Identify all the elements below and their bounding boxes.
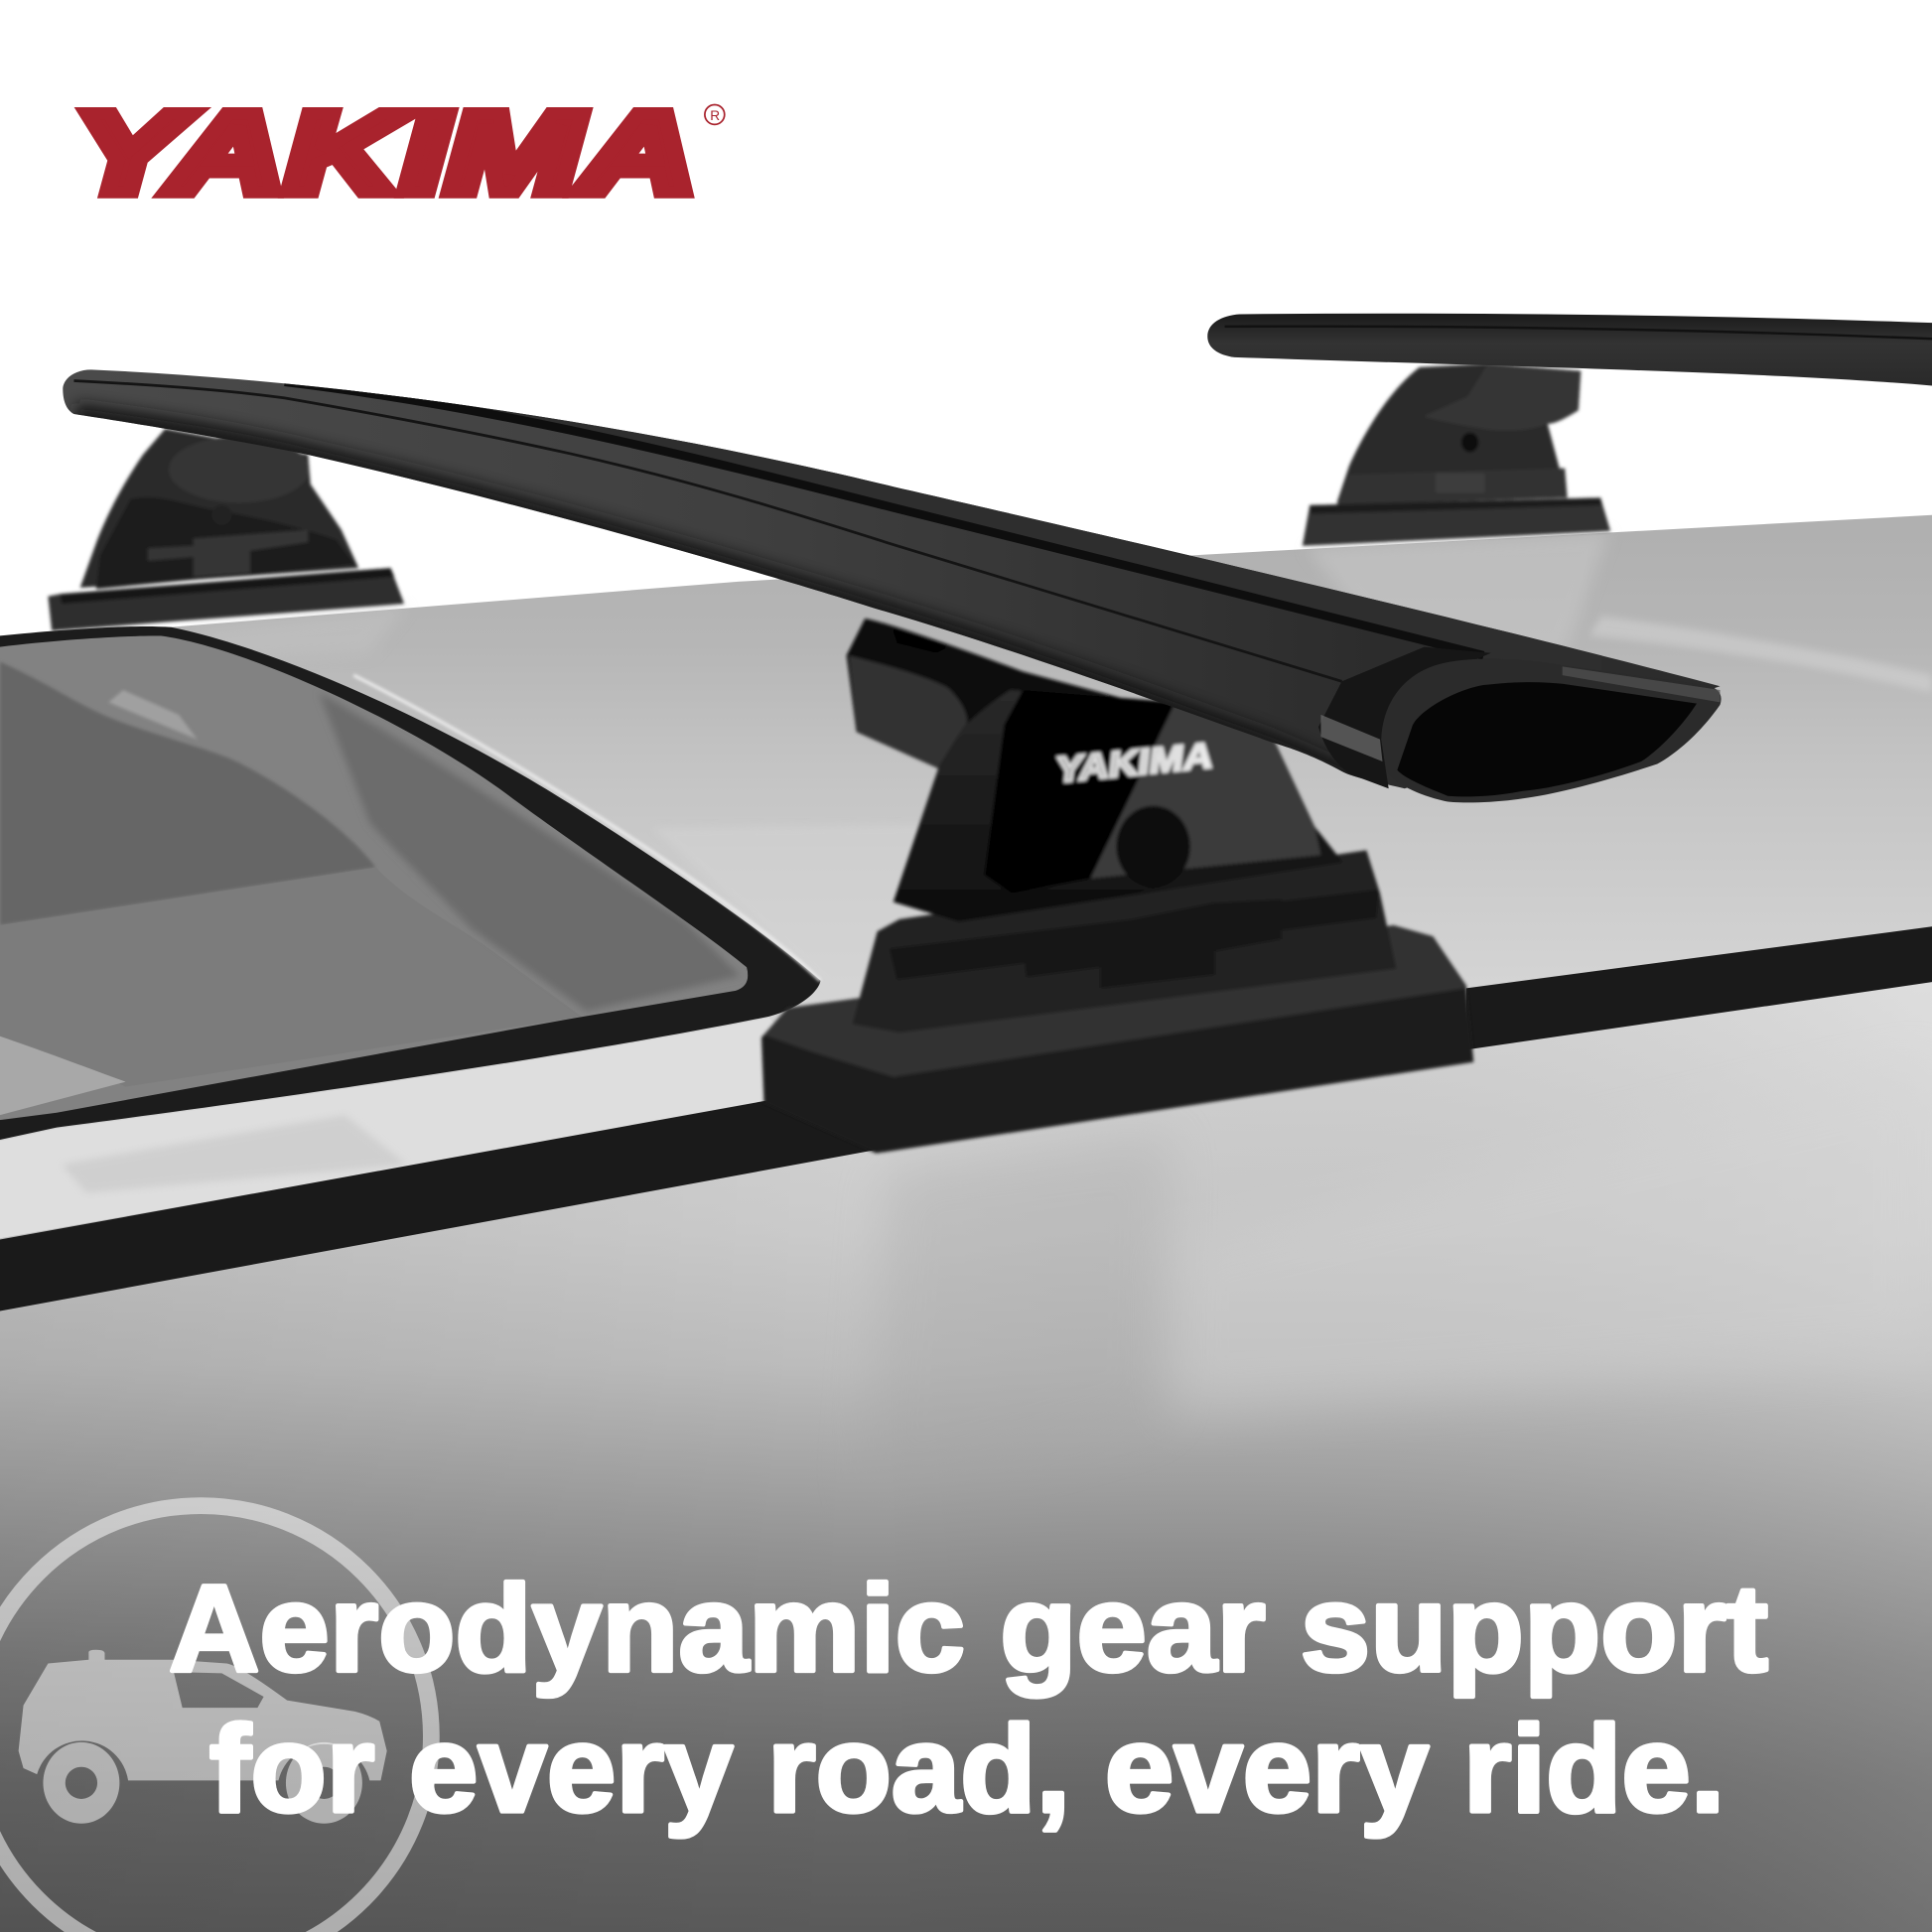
foot glossy tower	[894, 690, 1343, 921]
crossbar end cap	[1381, 659, 1722, 802]
car body below roof rail	[0, 936, 1932, 1932]
foot knob	[1116, 806, 1190, 888]
window glass reflections	[0, 635, 749, 1120]
logo: YAKIMA	[73, 90, 725, 217]
side window	[0, 617, 821, 1146]
rear rack foot, right	[1303, 363, 1610, 546]
icon: car in circle	[0, 1506, 431, 1932]
roof rail strip, right	[1466, 926, 1932, 1049]
foot lower housing	[853, 850, 1396, 1033]
foot arm	[847, 619, 1182, 768]
logo: YAKIMA: YAKIMA	[73, 90, 696, 217]
roof rail strip, left	[0, 1097, 878, 1311]
front crossbar	[63, 369, 1722, 802]
foot base pad	[761, 925, 1473, 1154]
foot logo: YAKIMA	[1053, 735, 1215, 790]
registered mark	[705, 104, 725, 124]
registered mark: R	[710, 108, 720, 123]
centre rack foot	[761, 619, 1473, 1154]
headline: for every road, every ride.	[209, 1701, 1725, 1838]
headline: Aerodynamic gear support	[169, 1561, 1768, 1698]
car roof panel	[0, 515, 1932, 1232]
crossbar shading	[73, 369, 1601, 788]
headline	[169, 1561, 1768, 1838]
rear rack foot, left	[48, 429, 404, 630]
crossbar collar	[1318, 647, 1491, 788]
rear crossbar	[1207, 314, 1932, 385]
foot clip	[1023, 899, 1282, 988]
